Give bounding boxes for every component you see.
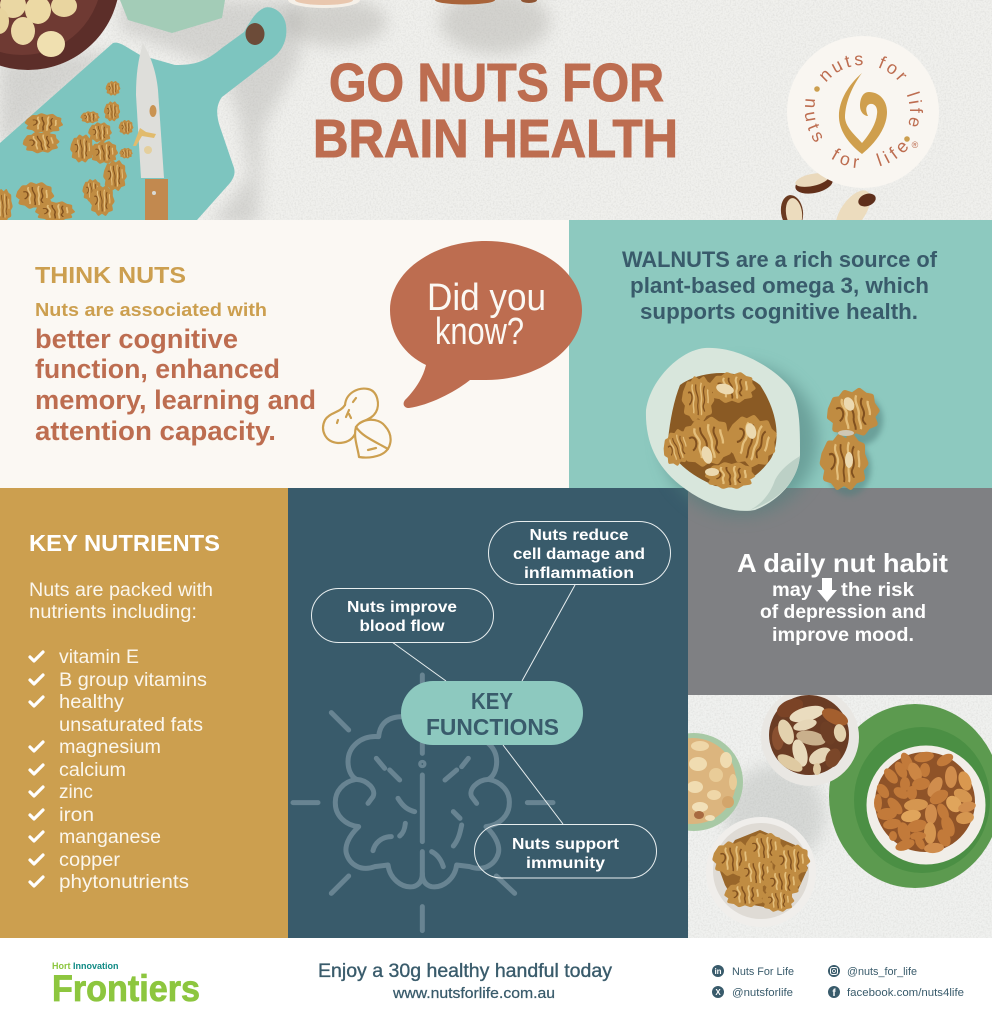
title bbox=[313, 53, 678, 169]
key statement: attention capacity. bbox=[35, 416, 276, 446]
walnuts text: supports cognitive health. bbox=[640, 299, 918, 324]
intro text: nutrients including: bbox=[29, 602, 197, 623]
social: facebook: facebook.com/nuts4life bbox=[847, 987, 964, 999]
decoration: cutting board bbox=[0, 7, 286, 220]
bowl: almonds bbox=[866, 746, 986, 864]
logo: hort innovation frontiers: Hort Innovation bbox=[52, 961, 118, 971]
walnuts text: plant-based omega 3, which bbox=[630, 273, 929, 298]
callout: cell damage: cell damage and bbox=[513, 546, 645, 563]
bowl: walnuts bbox=[706, 817, 816, 927]
callout: blood flow: Nuts improve bbox=[347, 599, 457, 616]
social: x bbox=[712, 986, 793, 999]
callout: did you know speech bubble: Did you bbox=[427, 277, 546, 319]
intro text: Nuts are associated with bbox=[35, 299, 267, 320]
callout: cell damage: Nuts reduce bbox=[530, 527, 629, 544]
social: x: @nutsforlife bbox=[732, 987, 793, 999]
panel: key functions bbox=[288, 488, 688, 938]
green plate bbox=[829, 704, 992, 888]
tagline: Enjoy a 30g healthy handful today bbox=[318, 961, 613, 982]
social: x: X bbox=[715, 988, 721, 997]
center pill: key functions: FUNCTIONS bbox=[426, 714, 559, 740]
habit text: may bbox=[772, 580, 812, 601]
nutrient list: calcium bbox=[59, 760, 126, 781]
social: instagram: @nuts_for_life bbox=[847, 966, 917, 978]
intro text bbox=[29, 580, 213, 623]
callout: cell damage: inflammation bbox=[524, 565, 634, 582]
social: facebook: f bbox=[832, 988, 836, 999]
decoration: brazil nuts bbox=[779, 171, 878, 239]
panel: key nutrients bbox=[0, 488, 288, 938]
habit text: improve mood. bbox=[772, 625, 914, 646]
callout: blood flow bbox=[312, 588, 494, 642]
bowl: peanuts bbox=[688, 733, 743, 831]
title: BRAIN HEALTH bbox=[313, 109, 678, 169]
key statement bbox=[35, 324, 316, 446]
panel: footer bbox=[0, 938, 992, 1024]
logo: nuts for life: nuts for life bbox=[804, 99, 908, 168]
callout: immunity: Nuts support bbox=[512, 836, 620, 853]
connector lines bbox=[392, 585, 575, 824]
center pill: key functions: KEY bbox=[471, 688, 513, 714]
logo: nuts for life: nuts for life bbox=[820, 56, 923, 126]
habit text: the risk bbox=[841, 580, 914, 601]
decoration: top bowls bbox=[288, 0, 537, 8]
photo: loose walnuts bbox=[823, 389, 883, 496]
nutrient list: zinc bbox=[59, 782, 93, 803]
center pill: key functions bbox=[401, 681, 583, 745]
callout: did you know speech bubble: know? bbox=[435, 311, 524, 353]
intro text: Nuts are packed with bbox=[29, 580, 213, 601]
habit text: of depression and bbox=[760, 602, 926, 623]
decoration: knife bbox=[136, 43, 168, 220]
nutrient list: healthy bbox=[59, 692, 125, 713]
heading: key nutrients: KEY NUTRIENTS bbox=[29, 530, 220, 556]
icon: peanut and hazelnut bbox=[323, 389, 391, 458]
nutrient list: copper bbox=[59, 850, 121, 871]
icon: brain bbox=[293, 675, 553, 931]
habit text bbox=[760, 580, 926, 646]
social: linkedin: Nuts For Life bbox=[732, 966, 794, 978]
decoration: chopped walnuts bbox=[0, 82, 156, 220]
panel: photo of nuts in bowls bbox=[688, 695, 992, 938]
nutrient list: manganese bbox=[59, 827, 161, 848]
title: GO NUTS FOR bbox=[329, 53, 664, 113]
key statement: function, enhanced bbox=[35, 354, 280, 384]
photo: bowl of walnuts bbox=[646, 348, 818, 516]
logo: nuts for life: ® bbox=[912, 140, 919, 150]
nutrient list: iron bbox=[59, 805, 94, 826]
callout: did you know speech bubble bbox=[390, 241, 582, 408]
nutrient list: B group vitamins bbox=[59, 670, 207, 691]
logo: hort innovation frontiers: Frontiers bbox=[52, 968, 200, 1009]
website: www.nutsforlife.com.au bbox=[392, 986, 555, 1002]
heading: think nuts: THINK NUTS bbox=[35, 262, 186, 288]
nutrient list: vitamin E bbox=[59, 647, 139, 668]
panel: daily nut habit bbox=[688, 488, 992, 695]
panel: walnuts fact bbox=[569, 220, 992, 488]
shadow bbox=[725, 765, 825, 865]
bowl: brazil nuts bbox=[761, 688, 859, 786]
icon: down arrow bbox=[817, 578, 837, 602]
nutrient list: phytonutrients bbox=[59, 872, 189, 893]
decoration: green napkin bbox=[120, 0, 225, 33]
logo: nuts for life bbox=[787, 36, 939, 188]
nutrient list: magnesium bbox=[59, 737, 161, 758]
walnuts text: WALNUTS are a rich source of bbox=[622, 247, 938, 272]
panel: think nuts bbox=[0, 220, 569, 488]
callout: blood flow: blood flow bbox=[360, 618, 445, 635]
nutrient list bbox=[59, 647, 207, 893]
decoration: macadamia bowl bbox=[0, 0, 120, 70]
callout: immunity: immunity bbox=[526, 855, 605, 872]
nutrient list: unsaturated fats bbox=[59, 715, 203, 736]
social: linkedin bbox=[712, 965, 794, 978]
panel: hero header bbox=[0, 0, 992, 220]
key statement: better cognitive bbox=[35, 324, 238, 354]
heading: daily nut habit: A daily nut habit bbox=[737, 548, 948, 578]
callout: cell damage bbox=[488, 522, 670, 584]
walnuts text bbox=[622, 247, 938, 324]
check marks bbox=[30, 652, 43, 886]
callout: immunity bbox=[474, 824, 656, 878]
social: linkedin: in bbox=[714, 967, 722, 976]
key statement: memory, learning and bbox=[35, 385, 316, 415]
